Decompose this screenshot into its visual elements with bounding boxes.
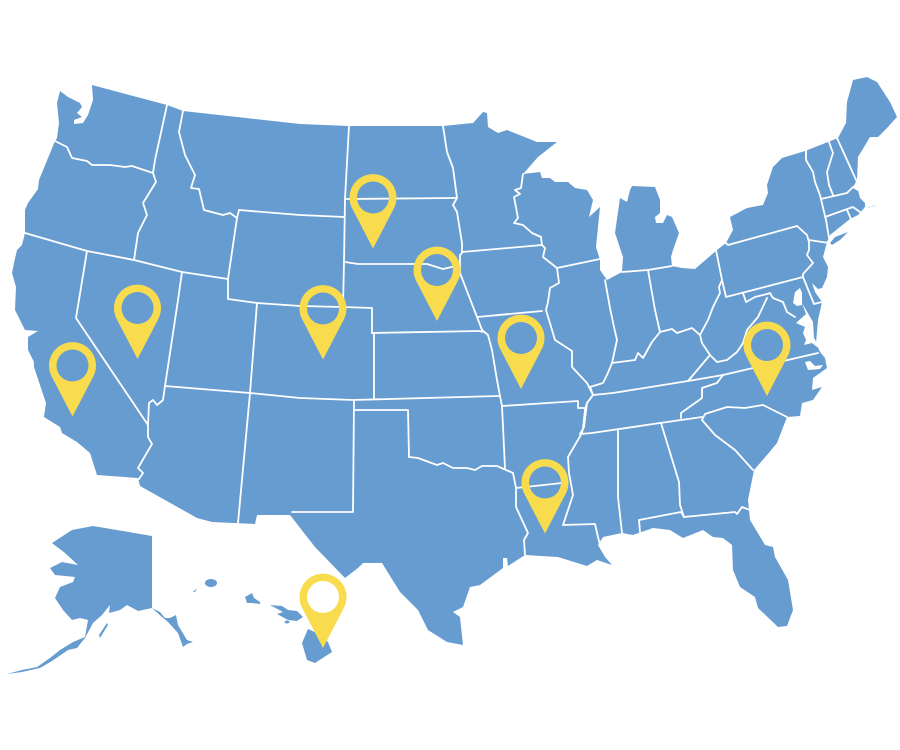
- pin: Missouri: [498, 315, 544, 389]
- map: contiguous United States: [12, 77, 897, 645]
- map: Hawaii: [193, 579, 332, 663]
- pin: North and South Dakota: [350, 174, 396, 248]
- pin: California: [49, 342, 96, 416]
- pin: Colorado: [300, 285, 346, 360]
- state borders: [25, 105, 860, 555]
- pin: Nevada: [114, 285, 161, 359]
- pin: Hawaii: [300, 574, 346, 648]
- pin: Nebraska: [414, 247, 460, 321]
- map: Alaska: [7, 526, 193, 674]
- pin: Virginia: [744, 322, 790, 396]
- pin: Arkansas and Louisiana: [522, 459, 568, 534]
